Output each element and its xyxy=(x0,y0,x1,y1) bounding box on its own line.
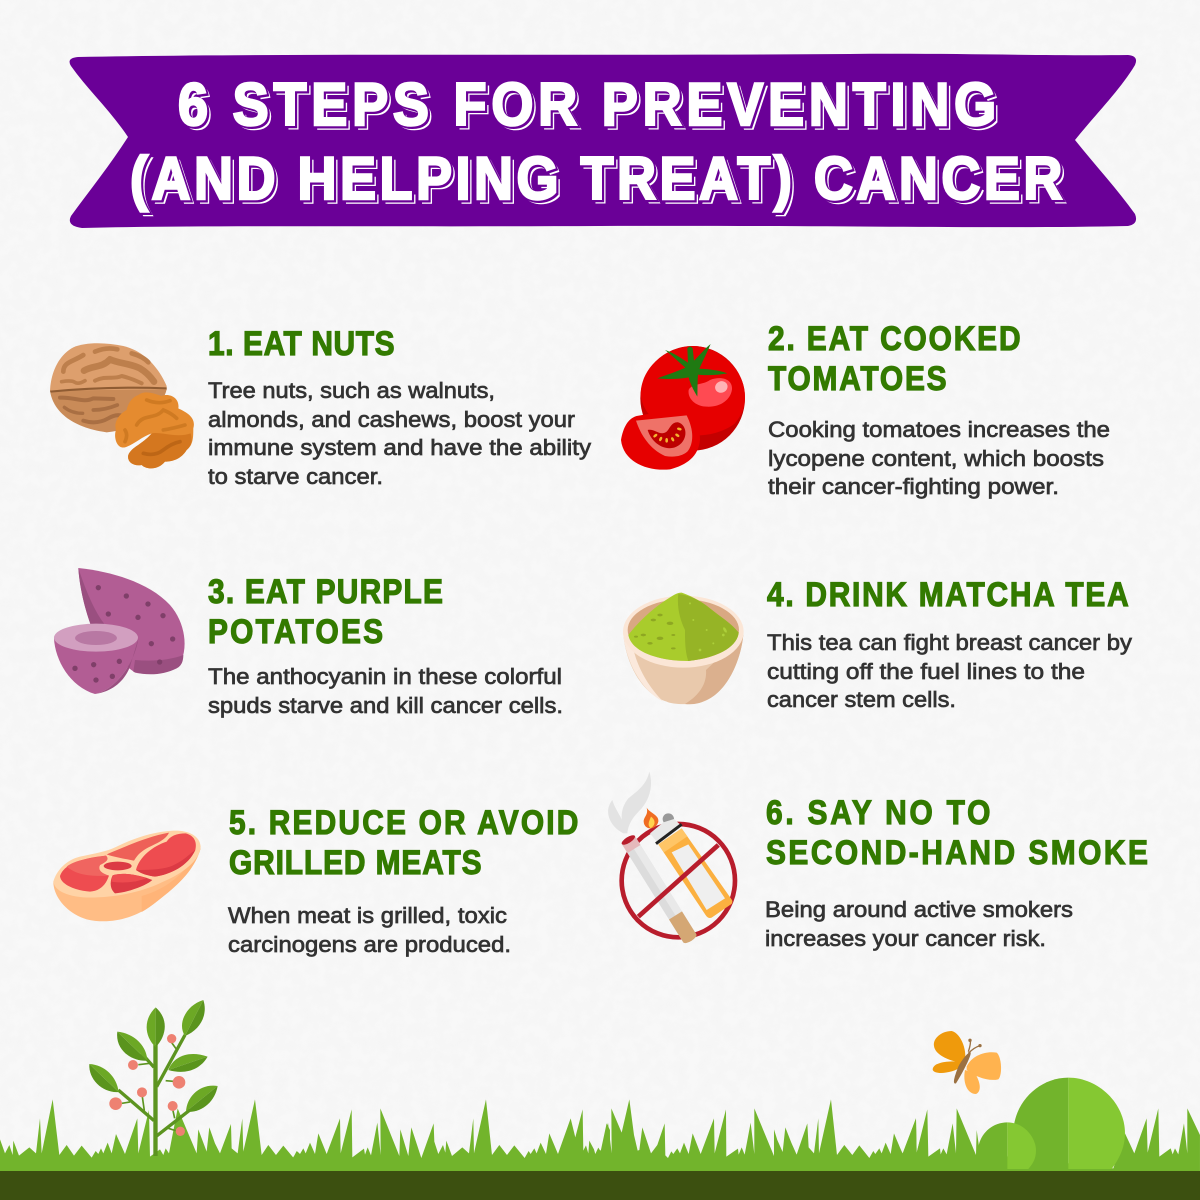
heading xyxy=(766,793,1148,871)
body text xyxy=(768,417,1110,499)
heading xyxy=(208,572,443,650)
heading: 3. EAT PURPLE xyxy=(208,572,443,610)
icon: purple potatoes xyxy=(54,568,185,694)
title text xyxy=(130,71,1066,216)
body text: cancer stem cells. xyxy=(767,687,956,712)
step 2: eat cooked tomatoes xyxy=(768,319,1110,499)
heading: TOMATOES xyxy=(768,359,947,397)
body text: cutting off the fuel lines to the xyxy=(767,659,1085,684)
heading: 5. REDUCE OR AVOID xyxy=(229,803,578,841)
title text: (AND HELPING TREAT) CANCER xyxy=(134,149,1066,216)
body text: lycopene content, which boosts xyxy=(768,446,1104,471)
icon: no smoking xyxy=(608,772,735,945)
icon: tomato xyxy=(621,344,745,470)
banner ribbon xyxy=(70,54,1136,228)
body text: Being around active smokers xyxy=(765,897,1073,922)
title text: 6 STEPS FOR PREVENTING xyxy=(182,75,1000,142)
grass middle right xyxy=(600,1099,920,1173)
title text: 6 STEPS FOR PREVENTING xyxy=(180,73,998,140)
heading: 1. EAT NUTS xyxy=(208,324,395,362)
grass middle left xyxy=(290,1099,610,1173)
heading: GRILLED MEATS xyxy=(229,843,482,881)
body text xyxy=(765,897,1073,951)
body text: immune system and have the ability xyxy=(208,435,591,460)
body text: This tea can fight breast cancer by xyxy=(767,630,1132,655)
berries xyxy=(109,1034,185,1136)
body text: their cancer-fighting power. xyxy=(768,474,1059,499)
body text xyxy=(228,903,511,957)
body text: increases your cancer risk. xyxy=(765,926,1046,951)
dark ground strip xyxy=(0,1171,1200,1200)
icon: steak xyxy=(53,831,201,921)
body text: The anthocyanin in these colorful xyxy=(208,664,562,689)
icon: walnut xyxy=(50,343,194,468)
plant with berries xyxy=(89,1000,218,1156)
body text xyxy=(767,630,1132,712)
step 6: say no to second-hand smoke xyxy=(765,793,1148,951)
title text: (AND HELPING TREAT) CANCER xyxy=(130,145,1062,213)
body text: spuds starve and kill cancer cells. xyxy=(208,693,563,718)
step 4: drink matcha tea xyxy=(767,575,1132,712)
title text: 6 STEPS FOR PREVENTING xyxy=(178,71,996,139)
grass right xyxy=(900,1108,1200,1173)
heading xyxy=(768,319,1021,397)
body text: When meat is grilled, toxic xyxy=(228,903,507,928)
body text: to starve cancer. xyxy=(208,464,383,489)
heading xyxy=(229,803,578,881)
body text: Cooking tomatoes increases the xyxy=(768,417,1110,442)
heading: 6. SAY NO TO xyxy=(766,793,990,831)
title banner xyxy=(70,54,1136,228)
heading: SECOND-HAND SMOKE xyxy=(766,833,1148,871)
heading: 4. DRINK MATCHA TEA xyxy=(767,575,1129,613)
grass and ground xyxy=(0,1099,1200,1200)
step 5: reduce or avoid grilled meats xyxy=(228,803,578,957)
heading: POTATOES xyxy=(208,612,383,650)
body text: carcinogens are produced. xyxy=(228,932,511,957)
step 3: eat purple potatoes xyxy=(208,572,563,718)
step 1: eat nuts xyxy=(208,324,591,489)
body text: almonds, and cashews, boost your xyxy=(208,407,575,432)
bushes xyxy=(978,1078,1125,1169)
leaves xyxy=(89,1000,218,1112)
body text xyxy=(208,378,591,489)
butterfly xyxy=(933,1031,1001,1094)
heading: 2. EAT COOKED xyxy=(768,319,1021,357)
grass left xyxy=(0,1099,300,1177)
title text: (AND HELPING TREAT) CANCER xyxy=(132,147,1064,214)
body text: Tree nuts, such as walnuts, xyxy=(208,378,495,403)
icon: matcha bowl xyxy=(623,593,744,704)
body text xyxy=(208,664,563,718)
